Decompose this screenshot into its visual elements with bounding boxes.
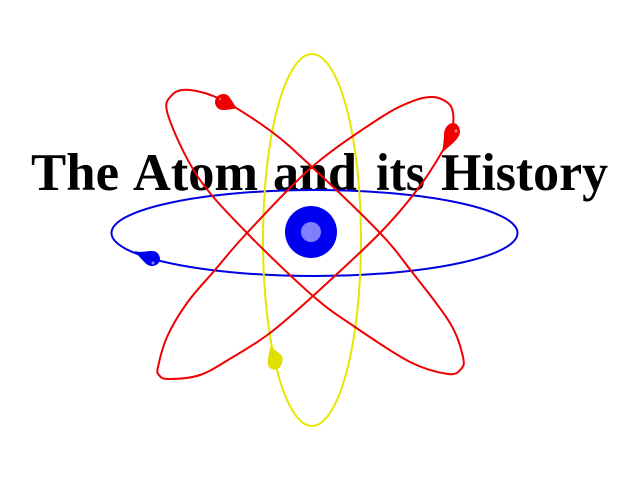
- nucleus: [285, 206, 337, 258]
- orbit: red diagonal ascending: [157, 97, 453, 379]
- electron: red top left: [215, 94, 237, 110]
- orbit: blue horizontal: [112, 190, 518, 276]
- electron: yellow bottom: [268, 345, 283, 370]
- title: and: [273, 144, 357, 202]
- title: Atom: [133, 144, 258, 202]
- orbit: red diagonal descending: [166, 90, 464, 374]
- electron: blue left: [134, 251, 160, 266]
- title: its: [376, 144, 425, 202]
- title: The: [31, 144, 119, 202]
- title: History: [441, 144, 608, 202]
- electron: red top right: [442, 123, 460, 153]
- orbit: yellow vertical: [263, 54, 361, 426]
